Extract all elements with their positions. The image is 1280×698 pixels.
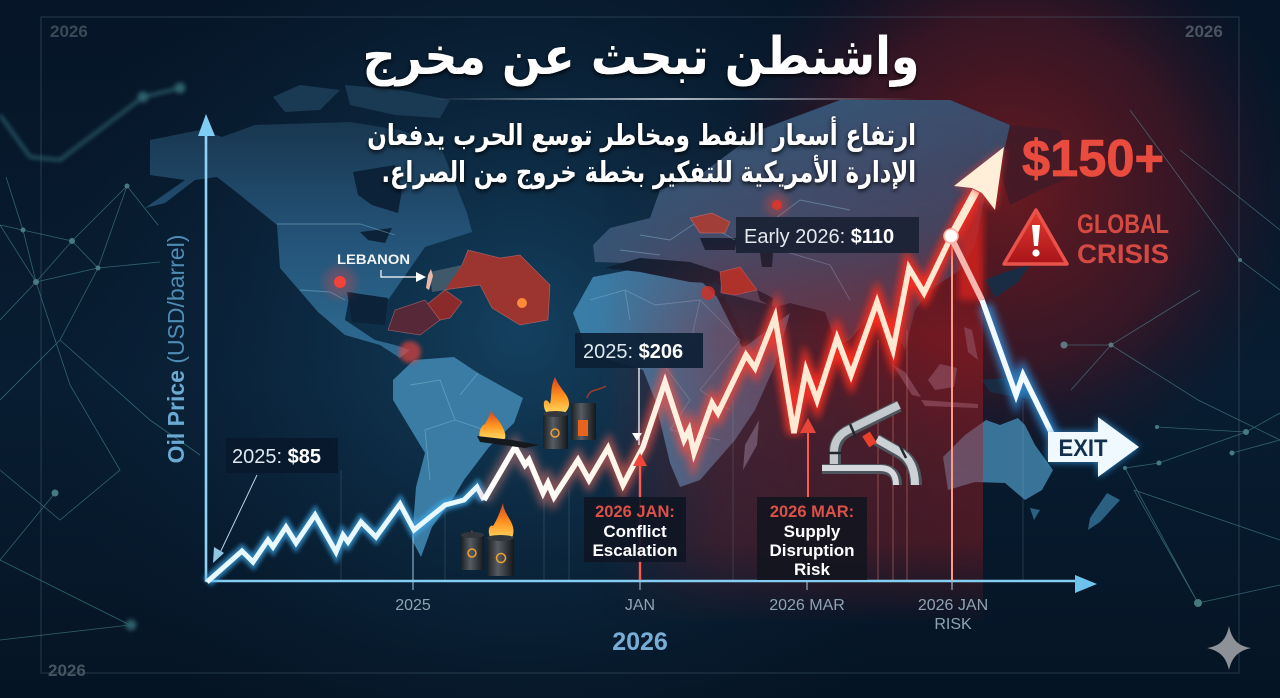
- x axis tick labels: 2026 JAN: [918, 597, 988, 614]
- islands: [743, 327, 978, 470]
- red rising segment: [484, 191, 976, 500]
- global crisis label: CRISIS: [1077, 239, 1169, 269]
- dark islands east: [982, 265, 1043, 400]
- icon: burning pipeline: [477, 410, 540, 448]
- global crisis label: [1077, 209, 1169, 269]
- global crisis label: GLOBAL: [1077, 209, 1169, 239]
- blue falling segment: [951, 237, 1052, 434]
- lebanon label: LEBANON: [337, 251, 410, 267]
- y axis title: Oil Price (USD/barrel): [163, 235, 189, 463]
- callout: 2026 Mar supply: Disruption: [770, 541, 854, 560]
- oil price line: [207, 191, 1052, 582]
- red conflict regions: [388, 213, 757, 335]
- subtitle: الإدارة الأمريكية للتفكير بخطة خروج من الصراع.: [382, 154, 916, 190]
- icon: burning barrels upper: [543, 377, 606, 449]
- y axis: [198, 114, 215, 582]
- x axis tick labels: 2025: [395, 597, 431, 614]
- world map: [145, 85, 1120, 557]
- blue rising segment: [207, 487, 484, 582]
- corner year top right: 2026: [1185, 22, 1223, 41]
- callout: 2025 $206: [575, 333, 703, 445]
- title divider: [430, 98, 920, 100]
- country borders: [277, 200, 850, 480]
- x axis tick labels: 2026 MAR: [769, 597, 845, 614]
- dark seas: [605, 238, 773, 347]
- exit arrow: EXIT: [1058, 435, 1108, 462]
- x axis: [206, 575, 1097, 593]
- title: واشنطن تبحث عن مخرج: [363, 25, 919, 88]
- rising arrow head: [954, 147, 1004, 210]
- callout: 2026 Mar supply: Supply: [784, 522, 841, 541]
- exit arrow: [1048, 417, 1139, 477]
- callout: 2026 Mar supply: Risk: [794, 560, 830, 579]
- icon: burning barrels lower: [461, 503, 514, 576]
- flames: [544, 377, 569, 416]
- callout: 2026 Mar supply: [757, 497, 867, 580]
- east asia coast in red: [1000, 125, 1075, 205]
- risk vertical line: [951, 237, 953, 581]
- red hot spots: [324, 193, 789, 363]
- callout: early 2026 $110: Early 2026: $110: [744, 226, 894, 248]
- callout: 2025 $85: 2025: $85: [232, 446, 321, 468]
- callout: 2025 $85: [213, 438, 338, 563]
- hudson bay and great lakes: [347, 165, 402, 325]
- x axis year: 2026: [612, 628, 668, 656]
- x axis tick labels: JAN: [625, 597, 655, 614]
- africa: [573, 268, 790, 487]
- callout: 2026 Jan conflict: [584, 497, 686, 562]
- icon: broken pipeline: [822, 405, 916, 485]
- red glow near arrow: [958, 195, 983, 300]
- callout: 2025 $206: 2025: $206: [583, 341, 683, 363]
- arrow: 2026 Mar marker: [800, 418, 816, 497]
- network pattern right: [1060, 110, 1280, 607]
- red risk band: [616, 228, 983, 614]
- europe and asia: [593, 100, 1010, 350]
- warning triangle icon: [1004, 210, 1067, 264]
- south america: [393, 357, 523, 557]
- arrow: 2026 Jan marker: [632, 433, 647, 580]
- price target: $150+: [1022, 130, 1164, 188]
- callout: 2026 Jan conflict: Escalation: [592, 541, 678, 560]
- vertical grid lines: [341, 330, 1023, 580]
- x axis tick labels: RISK: [934, 616, 972, 633]
- australia and new zealand: [943, 418, 1120, 530]
- callout: 2026 Jan conflict: 2026 JAN:: [595, 503, 675, 521]
- x axis tick labels: [395, 530, 988, 633]
- callout: 2026 Mar supply: 2026 MAR:: [770, 503, 854, 521]
- north america: [145, 85, 472, 358]
- subtitle: [367, 116, 916, 190]
- gray country highlight: [430, 265, 462, 292]
- lebanon label: [337, 251, 433, 290]
- corner year top left: 2026: [50, 22, 88, 41]
- network pattern left: [0, 84, 200, 640]
- callout: 2026 Jan conflict: Conflict: [603, 522, 667, 541]
- subtitle: ارتفاع أسعار النفط ومخاطر توسع الحرب يدفعان: [367, 116, 916, 153]
- peak marker: [944, 229, 958, 243]
- icon: sparkle watermark: [1207, 626, 1251, 670]
- corner year bottom left: 2026: [48, 661, 86, 680]
- callout: early 2026 $110: [736, 217, 919, 253]
- barrels: [543, 386, 606, 449]
